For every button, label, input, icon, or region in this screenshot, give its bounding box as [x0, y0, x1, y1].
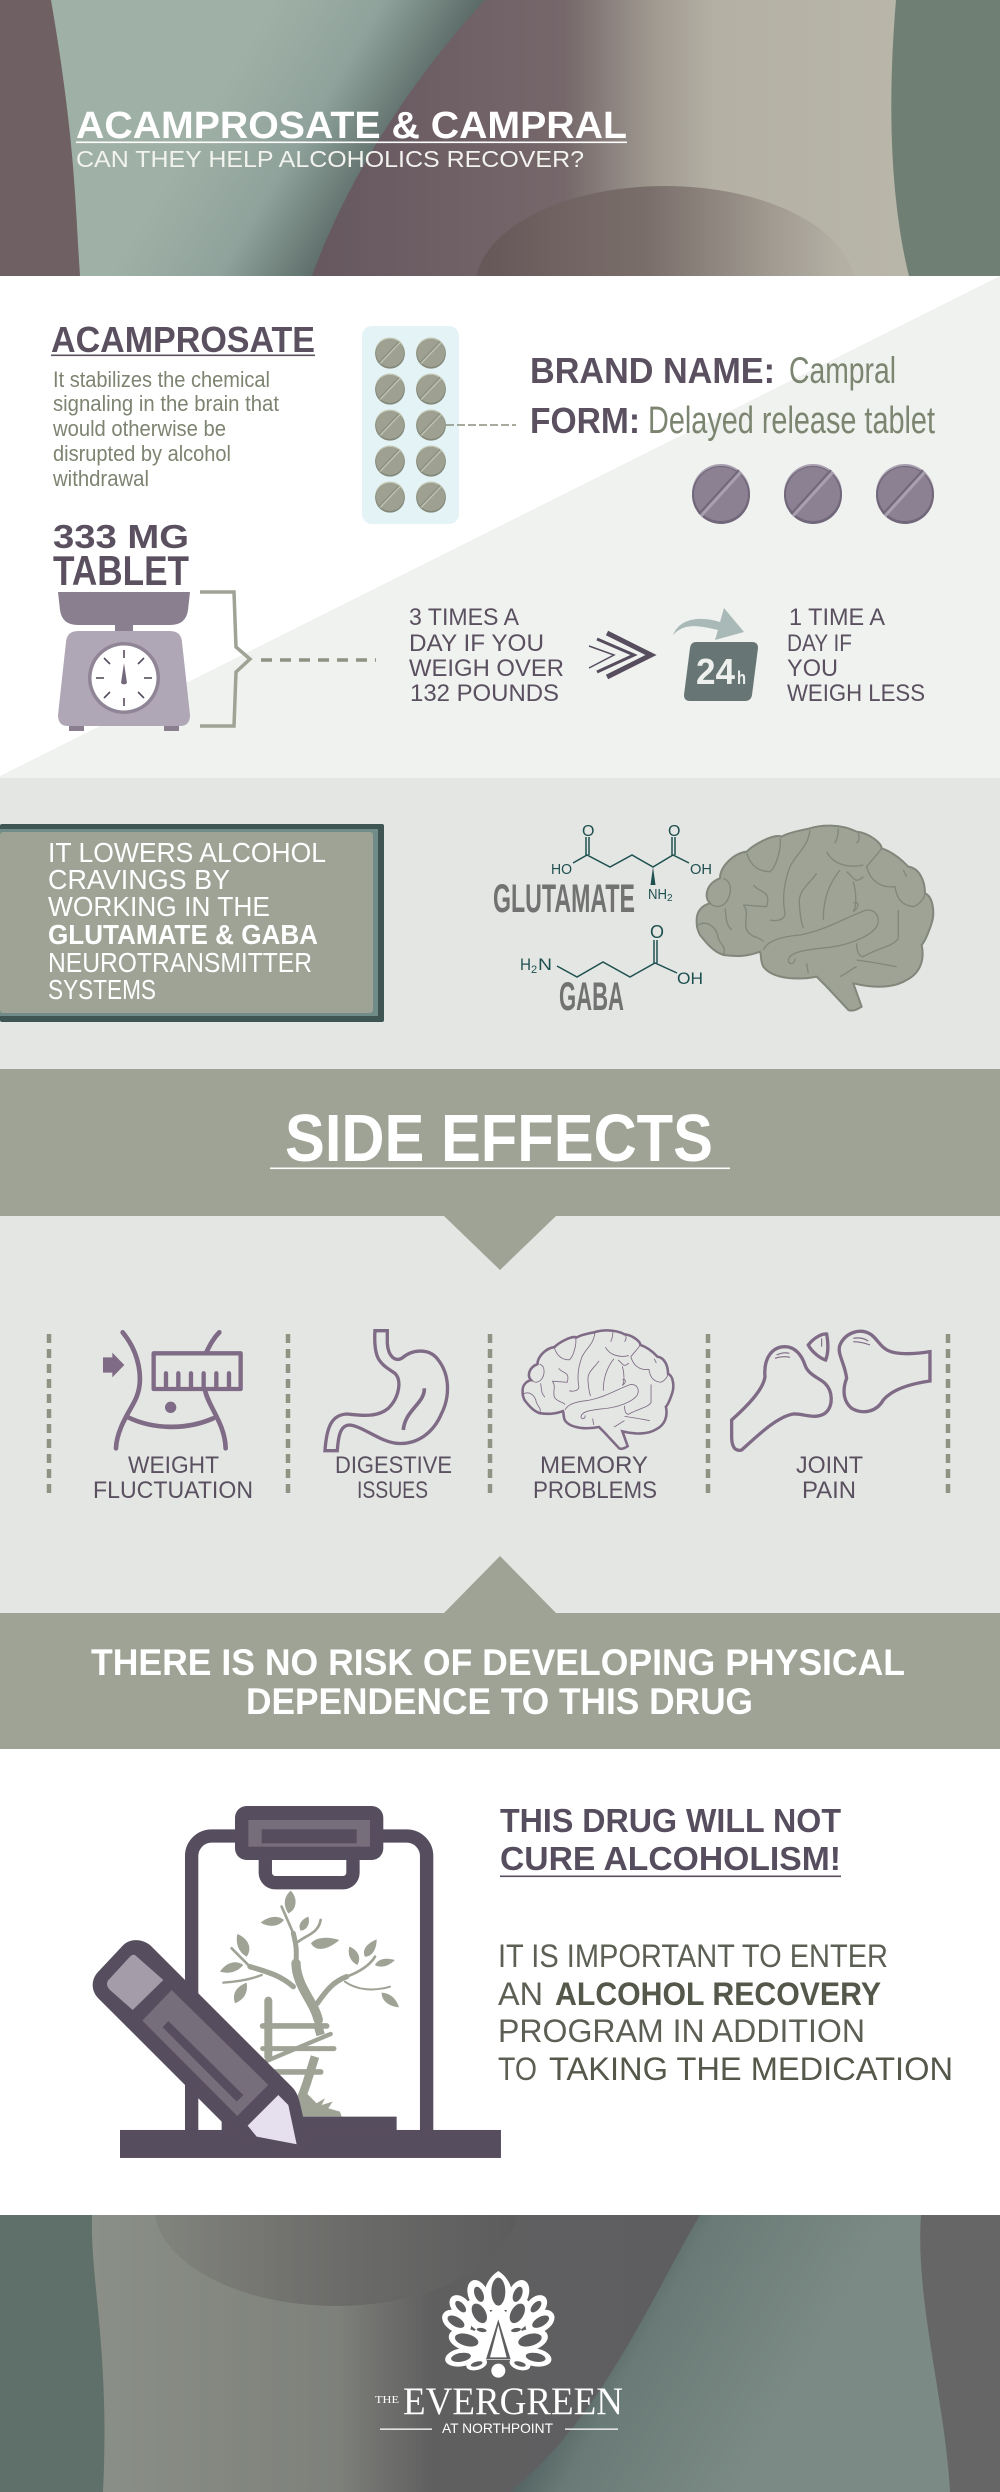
chemical structure: gaba: 2 — [531, 964, 537, 976]
panel: recovery background — [0, 1749, 1000, 2215]
chemical structure: glutamate: GLUTAMATE — [493, 877, 635, 921]
text: 1 time a day: DAY IF — [787, 630, 852, 657]
title: ACAMPROSATE & CAMPRAL — [76, 105, 627, 147]
tree — [223, 1907, 390, 2107]
callout band: no risk of dependence: THERE IS NO RISK OF DEVELOPING PHYSICAL — [91, 1642, 905, 1683]
wordmark: AT NORTHPOINT — [442, 2420, 553, 2436]
chemical structure: gaba — [520, 922, 703, 1019]
heading: will not cure — [500, 1802, 841, 1877]
heading: will not cure: CURE ALCOHOLISM! — [500, 1840, 841, 1877]
callout band: no risk of dependence — [0, 1556, 1000, 1749]
text block: description: disrupted by alcohol — [53, 441, 231, 466]
wordmark: THE — [375, 2394, 399, 2406]
text: 1 time a day — [787, 604, 925, 707]
panel: header banner — [0, 0, 1000, 276]
text: 3 times a day: WEIGH OVER — [409, 655, 564, 682]
heading band: side effects — [0, 1069, 1000, 1270]
chemical structure: glutamate: NH — [648, 886, 667, 903]
wordmark — [375, 2380, 623, 2436]
icon: 24 hour calendar: 24 — [696, 651, 735, 692]
logo: evergreen at northpoint — [375, 2271, 623, 2436]
text block: recovery program: TAKING THE MEDICATION — [549, 2051, 953, 2087]
text: 1 time a day: 1 TIME A — [789, 604, 885, 631]
label: digestive issues: DIGESTIVE — [335, 1452, 452, 1479]
chemical structure: gaba: O — [650, 922, 664, 942]
callout: lowers cravings box: NEUROTRANSMITTER — [48, 947, 312, 978]
callout: lowers cravings box — [0, 824, 384, 1022]
chemical structure: gaba: GABA — [559, 975, 624, 1019]
icon: waist and tape — [103, 1332, 241, 1448]
icon: stomach — [325, 1331, 448, 1451]
panel: side effects background — [0, 1216, 1000, 1613]
text block: recovery program: IT IS IMPORTANT TO ENTER — [498, 1938, 888, 1974]
label: digestive issues — [335, 1452, 452, 1504]
text: 1 time a day: YOU — [787, 655, 838, 682]
icon: peacock tree — [438, 2271, 559, 2378]
heading: 333 mg tablet: 333 MG — [53, 518, 189, 555]
label: memory problems — [533, 1452, 657, 1504]
text block: recovery program: ALCOHOL RECOVERY — [555, 1976, 881, 2012]
callout: lowers cravings box: CRAVINGS BY — [48, 864, 230, 895]
text block: description — [52, 367, 279, 491]
label: joint pain — [796, 1452, 863, 1504]
label: joint pain: JOINT — [796, 1452, 863, 1479]
subtitle: CAN THEY HELP ALCOHOLICS RECOVER? — [76, 146, 584, 172]
text: brand name: Campral — [789, 350, 896, 391]
icon: blister pack — [362, 326, 459, 524]
heading: acamprosate: ACAMPROSATE — [51, 319, 315, 360]
label: digestive issues: ISSUES — [357, 1477, 428, 1504]
chemical structure: gaba: H — [520, 955, 531, 974]
text: 3 times a day: 132 POUNDS — [410, 680, 559, 707]
label: weight fluctuation: WEIGHT — [128, 1452, 219, 1479]
chemical structure: glutamate: 2 — [667, 893, 673, 904]
icon: brain — [697, 826, 933, 1011]
panel: footer banner — [0, 2215, 1000, 2492]
chemical structure: glutamate: O — [582, 823, 594, 840]
panel: acamprosate overview background — [0, 276, 1000, 778]
dashed dividers — [49, 1334, 948, 1494]
icon: joint — [732, 1331, 930, 1450]
callout: lowers cravings box: SYSTEMS — [48, 974, 156, 1005]
icon: clipboard with tree and pencil — [93, 1806, 501, 2158]
callout band: no risk of dependence: DEPENDENCE TO THIS DRUG — [246, 1681, 753, 1722]
chemical structure: glutamate: OH — [690, 861, 712, 878]
icon: weighing scale — [58, 592, 190, 731]
heading: 333 mg tablet — [53, 518, 189, 594]
arrow: chevrons — [589, 633, 651, 677]
text block: description: would otherwise be — [52, 416, 226, 441]
wordmark: EVERGREEN — [403, 2380, 623, 2423]
label: memory problems: MEMORY — [540, 1452, 648, 1479]
chemical structure: glutamate: HO — [551, 861, 572, 878]
icon: 24 hour calendar: h — [737, 668, 746, 688]
text: 1 time a day: WEIGH LESS — [787, 680, 925, 707]
text block: description: signaling in the brain that — [53, 391, 279, 416]
text: brand name: BRAND NAME: — [530, 350, 775, 391]
text: 3 times a day: DAY IF YOU — [409, 630, 544, 657]
chemical structure: gaba: OH — [677, 969, 703, 988]
text: form — [530, 400, 935, 442]
icon: memory brain — [523, 1330, 673, 1449]
icon: three tablets — [692, 464, 934, 524]
heading band: side effects: SIDE EFFECTS — [285, 1101, 713, 1176]
text block: description: withdrawal — [52, 466, 149, 491]
text: 3 times a day — [409, 604, 564, 707]
text: 3 times a day: 3 TIMES A — [409, 604, 519, 631]
panel: mechanism background — [0, 778, 1000, 1069]
text block: description: It stabilizes the chemical — [53, 367, 270, 392]
chemical structure: gaba: N — [538, 955, 552, 974]
text block: recovery program: AN — [498, 1976, 543, 2012]
text block: recovery program: TO — [498, 2051, 537, 2087]
pencil — [93, 1940, 310, 2147]
heading: 333 mg tablet: TABLET — [53, 547, 189, 594]
callout: lowers cravings box: GLUTAMATE & GABA — [48, 919, 318, 950]
bracket — [200, 592, 250, 726]
label: weight fluctuation — [93, 1452, 253, 1504]
chemical structure: glutamate — [493, 823, 712, 921]
dashed connector — [261, 658, 376, 662]
heading: will not cure: THIS DRUG WILL NOT — [500, 1802, 841, 1839]
callout: lowers cravings box: IT LOWERS ALCOHOL — [48, 837, 326, 868]
label: joint pain: PAIN — [802, 1477, 856, 1504]
text block: recovery program — [498, 1938, 953, 2087]
label: weight fluctuation: FLUCTUATION — [93, 1477, 253, 1504]
dashed connector — [446, 424, 516, 426]
text: form: FORM: — [530, 400, 640, 441]
label: memory problems: PROBLEMS — [533, 1477, 657, 1504]
chemical structure: glutamate: O — [668, 823, 680, 840]
callout: lowers cravings box: WORKING IN THE — [48, 891, 270, 922]
text block: recovery program: PROGRAM IN ADDITION — [498, 2013, 865, 2049]
icon: 24 hour calendar — [673, 608, 758, 701]
